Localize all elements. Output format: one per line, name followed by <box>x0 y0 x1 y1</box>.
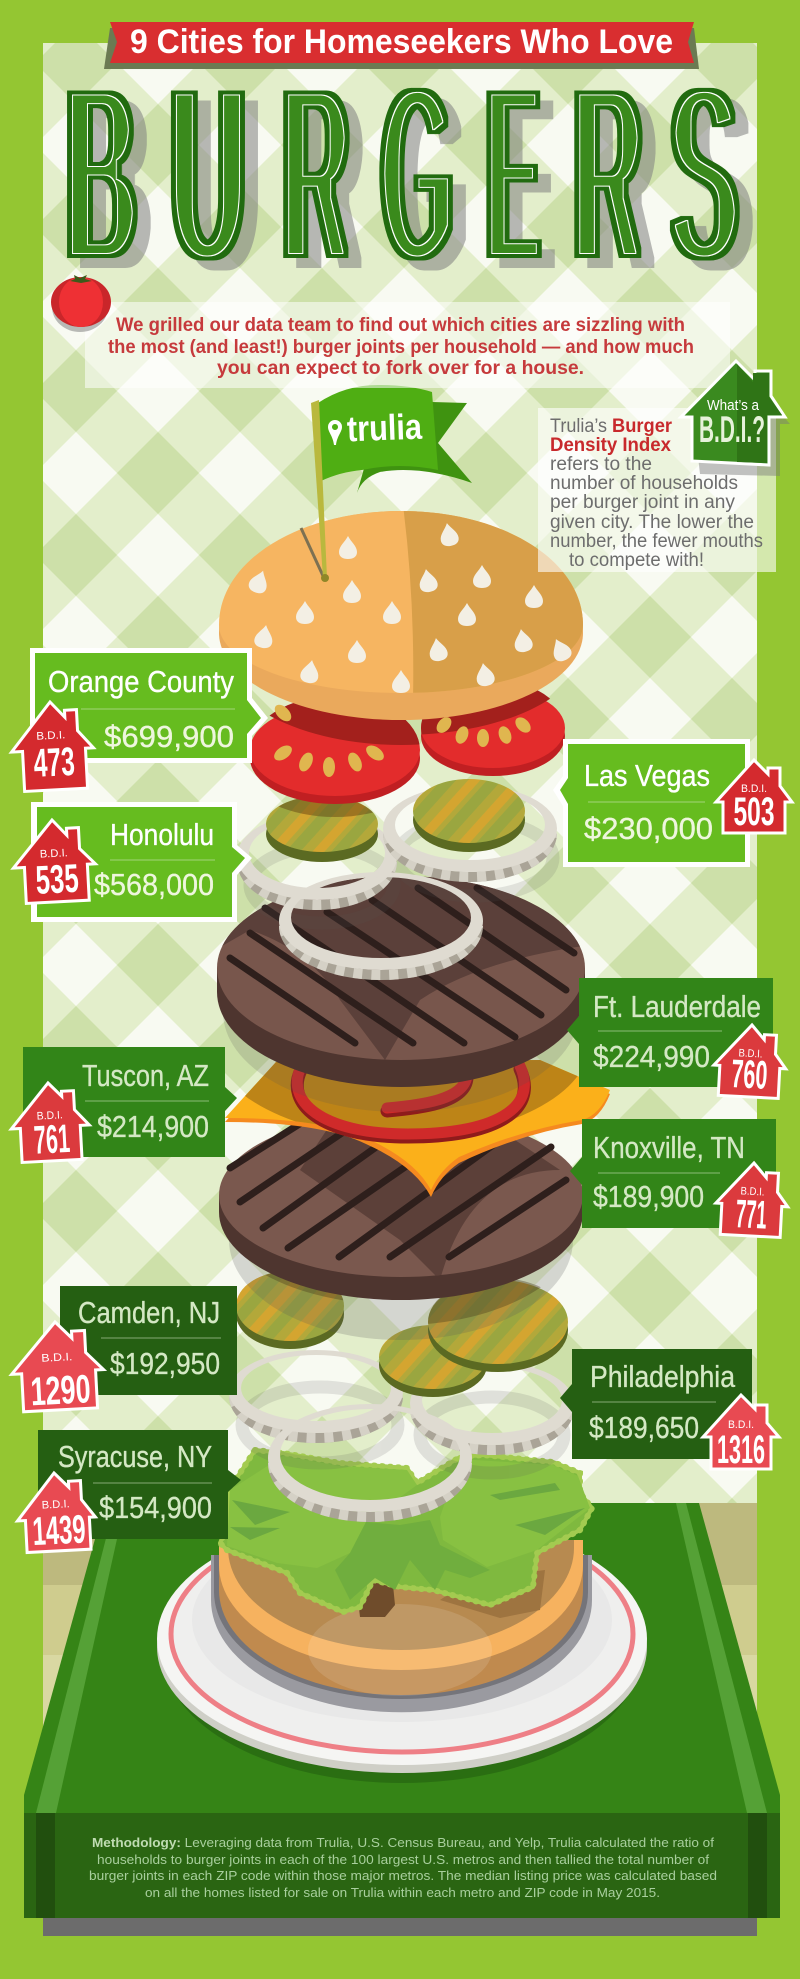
onion rings lower <box>229 1350 574 1517</box>
callout text: number, the fewer mouths <box>550 531 763 552</box>
house badge: 535: 535 <box>35 857 80 903</box>
label: Knoxville, TN <box>570 1119 776 1228</box>
tomato slice: right <box>421 690 565 776</box>
pickle: right <box>428 1280 568 1372</box>
intro panel <box>85 302 730 388</box>
house badge: 1290: B.D.I. <box>41 1351 73 1365</box>
flag pole <box>311 400 327 578</box>
icon: map pin <box>328 420 342 445</box>
pickle: middle <box>379 1325 487 1397</box>
house badge: 760 <box>712 1023 788 1099</box>
sesame seeds <box>247 522 574 693</box>
label: Philadelphia: Philadelphia <box>590 1359 736 1394</box>
onion ring: centre <box>279 872 483 975</box>
label: Honolulu: Honolulu <box>110 817 214 852</box>
house badge: 760: 760 <box>730 1052 769 1098</box>
label: Knoxville, TN: Knoxville, TN <box>593 1130 745 1165</box>
label: Camden, NJ <box>60 1286 237 1395</box>
ketchup <box>297 1066 524 1137</box>
house badge: 761: B.D.I. <box>36 1109 63 1123</box>
trulia logo text: trulia <box>346 406 423 449</box>
callout text: to compete with! <box>569 550 704 571</box>
house badge: 761 <box>9 1081 91 1164</box>
house badge: 503: 503 <box>734 790 774 834</box>
patty upper <box>215 870 590 1112</box>
label: Ft. Lauderdale: $224,990 <box>593 1039 710 1074</box>
panel: green table <box>24 1503 780 1918</box>
callout: what is B.D.I. text panel <box>538 408 776 572</box>
intro text: the most (and least!) burger joints per household — and how much <box>108 337 694 358</box>
house badge: 760: B.D.I. <box>738 1047 763 1061</box>
house badge: 1290 <box>9 1320 106 1415</box>
heading: BURGERS: U <box>171 29 245 318</box>
heading: BURGERS: B <box>67 31 136 319</box>
pickle: left <box>266 799 378 862</box>
label: Philadelphia: $189,650 <box>589 1410 699 1445</box>
house badge: 1316 <box>703 1395 779 1472</box>
callout text: per burger joint in any <box>550 492 735 513</box>
label: Tuscon, AZ: $214,900 <box>97 1109 209 1144</box>
label: Ft. Lauderdale <box>567 978 773 1087</box>
house badge: 473 <box>9 700 96 792</box>
label: Orange County <box>30 648 268 763</box>
label: Orange County: $699,900 <box>104 719 234 754</box>
callout text: Density Index <box>550 435 671 456</box>
heading: BURGERS: R <box>283 30 349 318</box>
flag front <box>318 385 438 481</box>
tomato slices <box>250 690 565 804</box>
onion ring: left <box>237 813 397 905</box>
icon: What's a B.D.I.? house <box>681 361 790 476</box>
label: Honolulu: $568,000 <box>94 867 214 902</box>
house badge: 1439: 1439 <box>31 1507 87 1554</box>
label: Tuscon, AZ <box>23 1047 237 1157</box>
heading: BURGERS: S <box>670 29 738 318</box>
heading: BURGERS: R <box>574 31 642 319</box>
house badge: 473: 473 <box>33 740 76 786</box>
label: Syracuse, NY: Syracuse, NY <box>58 1439 212 1474</box>
callout text: number of households <box>550 473 738 494</box>
ring shadows lower <box>242 1387 564 1473</box>
label: Camden, NJ: $192,950 <box>110 1346 220 1381</box>
house badge: 535: B.D.I. <box>39 847 68 861</box>
callout text: Trulia’s <box>550 416 607 437</box>
label: Orange County: Orange County <box>48 664 234 699</box>
ring shadows upper <box>250 820 553 923</box>
flag: Trulia <box>311 385 472 582</box>
house badge: 503: B.D.I. <box>741 783 767 795</box>
methodology text: burger joints in each ZIP code within those major metros. The median listing price was calculated based <box>89 1868 717 1883</box>
banner text: 9 Cities for Homeseekers Who Love <box>130 23 673 61</box>
label: Honolulu <box>31 802 252 922</box>
label: Syracuse, NY <box>38 1430 241 1539</box>
onion ring: right <box>410 1362 574 1450</box>
pickles upper <box>266 779 525 862</box>
house badge: 1290: 1290 <box>29 1367 92 1414</box>
house badge: 771: B.D.I. <box>740 1185 765 1199</box>
house badge: 761: 761 <box>33 1117 71 1163</box>
plate <box>157 1513 647 1783</box>
onion rings upper <box>237 785 557 975</box>
callout text: Burger <box>612 416 673 437</box>
onion ring: right <box>383 785 557 877</box>
methodology text: Methodology: Leveraging data from Trulia, U.S. Census Bureau, and Yelp, Trulia calculated the ratio of <box>92 1835 714 1850</box>
house badge: 771 <box>714 1161 790 1239</box>
house badge: 1439: B.D.I. <box>41 1498 70 1512</box>
title banner <box>104 22 699 69</box>
onion ring: front <box>268 1404 472 1517</box>
house badge: 1439 <box>15 1471 97 1555</box>
house badge: 535 <box>11 818 97 904</box>
pickle: left <box>237 1273 344 1349</box>
onion ring: left <box>229 1350 403 1438</box>
lettuce <box>220 1450 592 1612</box>
pickle: right <box>413 779 525 852</box>
label: Tuscon, AZ: Tuscon, AZ <box>82 1058 209 1093</box>
callout text: given city. The lower the <box>550 512 754 533</box>
label: Knoxville, TN: $189,900 <box>593 1179 704 1214</box>
icon: tomato <box>51 275 111 332</box>
label: Las Vegas: $230,000 <box>584 811 713 846</box>
patty lower <box>219 1110 583 1340</box>
heading: BURGERS: G <box>381 31 453 319</box>
methodology text: households to burger joints in each of the 100 largest U.S. metros and then tallied the total number of <box>97 1852 709 1867</box>
label: Camden, NJ: Camden, NJ <box>78 1295 220 1330</box>
label: Philadelphia <box>560 1349 752 1459</box>
label: Las Vegas <box>553 739 750 867</box>
house badge: 1316: B.D.I. <box>728 1419 754 1431</box>
intro text: you can expect to fork over for a house. <box>217 358 584 379</box>
pickles lower <box>237 1273 568 1397</box>
bottom bun <box>211 1540 592 1712</box>
top bun <box>219 505 590 720</box>
heading: BURGERS <box>67 29 738 319</box>
methodology text <box>89 1835 717 1900</box>
label: Ft. Lauderdale: Ft. Lauderdale <box>593 989 761 1024</box>
tomato slice: left <box>250 703 420 804</box>
pole pin <box>321 574 329 582</box>
intro text: We grilled our data team to find out which cities are sizzling with <box>116 315 685 336</box>
icon: What's a B.D.I.? house: What’s a <box>707 397 760 414</box>
methodology text: on all the homes listed for sale on Trulia within each metro and ZIP code in May 2015. <box>145 1885 660 1900</box>
label: Las Vegas: Las Vegas <box>584 758 710 793</box>
heading: BURGERS: E <box>487 31 539 319</box>
callout text: refers to the <box>550 454 652 475</box>
label: Syracuse, NY: $154,900 <box>99 1490 212 1525</box>
house badge: 473: B.D.I. <box>36 729 66 743</box>
callout text <box>550 416 763 571</box>
cheese <box>225 1060 610 1197</box>
house badge: 503 <box>716 760 792 834</box>
flag ribbon back <box>357 402 472 493</box>
intro text <box>108 315 694 379</box>
